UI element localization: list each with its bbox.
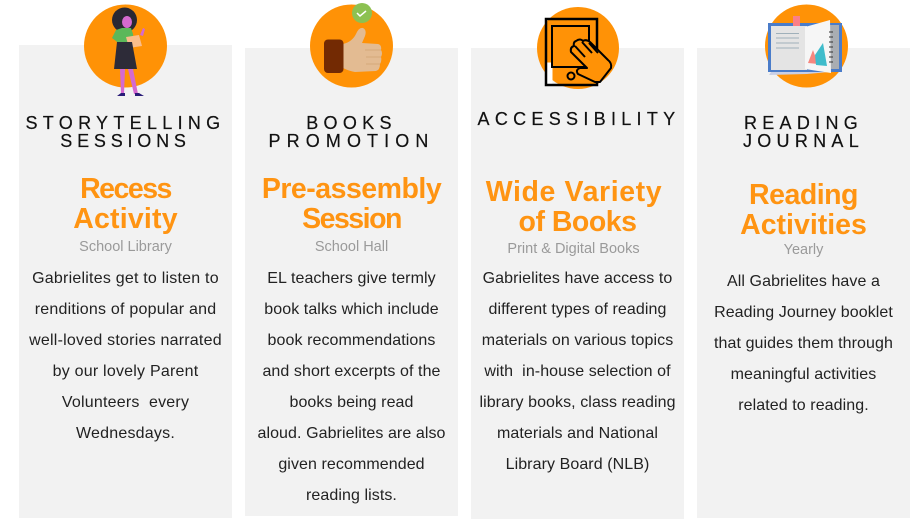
body text: materials on various topics xyxy=(482,332,673,349)
title: pre-assembly session xyxy=(262,173,442,235)
title: wide variety of books: of Books xyxy=(519,206,636,238)
body text xyxy=(29,270,222,442)
body text xyxy=(479,270,676,473)
column: storytelling sessions text xyxy=(26,113,225,442)
body text: with in-house selection of xyxy=(484,363,671,380)
column: books promotion text xyxy=(257,113,446,504)
icon: orange circle with tablet and hand xyxy=(537,7,619,89)
body text: related to reading. xyxy=(738,397,869,414)
body text: aloud. Gabrielites are also xyxy=(257,425,446,442)
body text: reading lists. xyxy=(306,487,397,504)
icon: orange circle with woman holding clipboard xyxy=(84,4,167,96)
heading: accessibility: ACCESSIBILITY xyxy=(478,109,680,129)
title: wide variety of books: Wide Variety xyxy=(486,176,662,208)
heading: reading journal xyxy=(743,113,864,151)
body text: renditions of popular and xyxy=(35,301,216,318)
icon: orange circle with thumbs up and check badge xyxy=(310,3,393,88)
body text: library books, class reading xyxy=(479,394,676,411)
heading: reading journal: JOURNAL xyxy=(743,131,864,151)
heading: storytelling sessions xyxy=(26,113,225,151)
column: accessibility text xyxy=(477,109,680,473)
heading: books promotion: PROMOTION xyxy=(269,131,434,151)
body text: and short excerpts of the xyxy=(262,363,441,380)
icon: orange circle with open book xyxy=(765,4,848,88)
body text: different types of reading xyxy=(489,301,666,318)
heading: storytelling sessions: STORYTELLING xyxy=(26,113,225,133)
body text: by our lovely Parent xyxy=(53,363,198,380)
body text: Reading Journey booklet xyxy=(714,304,893,321)
subtitle: yearly: Yearly xyxy=(784,242,823,258)
body text: Gabrielites get to listen to xyxy=(32,270,219,287)
panel: reading journal xyxy=(697,48,910,518)
title: recess activity xyxy=(73,173,178,235)
subtitle: school library: School Library xyxy=(79,239,172,255)
body text: Volunteers every xyxy=(62,394,189,411)
panel: accessibility xyxy=(471,48,684,519)
title: pre-assembly session: Pre-assembly xyxy=(262,173,441,205)
body text xyxy=(714,273,893,414)
title: recess activity: Activity xyxy=(73,203,178,235)
panel: books promotion xyxy=(245,48,458,516)
body text: Wednesdays. xyxy=(76,425,175,442)
subtitle: print and digital books: Print & Digital Books xyxy=(507,241,640,257)
body text: Library Board (NLB) xyxy=(506,456,649,473)
title: reading activities: Reading xyxy=(749,179,858,211)
body text: All Gabrielites have a xyxy=(727,273,880,290)
body text: Gabrielites have access to xyxy=(483,270,672,287)
column: reading journal text xyxy=(714,113,893,414)
panel: storytelling sessions xyxy=(19,45,232,518)
body text: EL teachers give termly xyxy=(267,270,436,287)
body text: materials and National xyxy=(497,425,658,442)
heading: storytelling sessions: SESSIONS xyxy=(60,131,191,151)
body text: book talks which include xyxy=(264,301,439,318)
title: reading activities xyxy=(740,179,867,241)
title: reading activities: Activities xyxy=(740,209,867,241)
subtitle: school hall: School Hall xyxy=(315,239,388,255)
body text: that guides them through xyxy=(714,335,893,352)
title: recess activity: Recess xyxy=(80,173,171,205)
title: wide variety of books xyxy=(486,176,662,238)
heading: books promotion xyxy=(269,113,434,151)
body text xyxy=(257,270,446,504)
heading: reading journal: READING xyxy=(744,113,863,133)
title: pre-assembly session: Session xyxy=(302,203,401,235)
body text: meaningful activities xyxy=(731,366,876,383)
body text: book recommendations xyxy=(268,332,435,349)
heading: books promotion: BOOKS xyxy=(306,113,397,133)
body text: given recommended xyxy=(278,456,425,473)
body text: books being read xyxy=(289,394,414,411)
body text: well-loved stories narrated xyxy=(29,332,222,349)
